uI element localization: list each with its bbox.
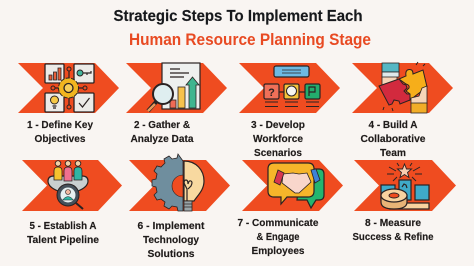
icon: handshake in speech bubbles — [268, 163, 324, 208]
arrow 6 — [129, 160, 230, 211]
icon: document with magnifier and bars — [148, 63, 200, 111]
panel: step 8 measure success and refine: Success & Refine — [352, 231, 434, 243]
panel: step 5 establish a talent pipeline: Talent Pipeline — [27, 234, 99, 246]
panel: step 2 gather and analyze data — [126, 63, 227, 145]
arrow 8 — [354, 160, 456, 211]
icon: scenario flow boxes: ? — [268, 87, 275, 99]
icon: puzzle pieces and hands — [379, 62, 427, 113]
label 5: 5 - Establish A — [30, 220, 97, 232]
icon: star podium and tape measure — [381, 163, 429, 209]
icon: talent funnel with magnifier — [48, 161, 88, 209]
icon: objectives gear and tiles — [45, 64, 94, 112]
title: Strategic Steps To Implement Each — [114, 8, 362, 25]
panel: step 1 define key objectives — [18, 63, 119, 145]
panel: step 3 develop workforce scenarios: Scenarios — [254, 147, 302, 159]
panel: step 3 develop workforce scenarios — [239, 63, 340, 159]
panel: step 2 gather and analyze data: Analyze Data — [130, 133, 194, 145]
icon: half gear half lightbulb — [152, 154, 204, 211]
panel: step 6 implement technology solutions — [129, 154, 230, 260]
label 1: 1 - Define Key — [27, 119, 93, 131]
panel: step 7 communicate and engage employees: & Engage — [256, 231, 300, 243]
panel: step 8 measure success and refine — [352, 160, 456, 243]
panel: step 4 build a collaborative team: Collaborative — [360, 133, 426, 145]
panel: step 3 develop workforce scenarios: Workforce — [253, 133, 303, 145]
label 8: 8 - Measure — [365, 217, 421, 229]
arrow 5 — [22, 160, 122, 211]
arrow 1 — [18, 63, 119, 113]
label 4: 4 - Build A — [368, 119, 418, 131]
label 6: 6 - Implement — [138, 220, 205, 232]
label 2: 2 - Gather & — [134, 119, 190, 131]
label 3: 3 - Develop — [251, 119, 305, 131]
panel: step 5 establish a talent pipeline — [22, 160, 122, 246]
label 7: 7 - Communicate — [238, 217, 319, 229]
panel: step 7 communicate and engage employees — [238, 160, 343, 257]
panel: step 4 build a collaborative team — [352, 62, 453, 159]
panel: step 6 implement technology solutions: Solutions — [148, 248, 195, 260]
arrow 3 — [239, 63, 340, 113]
arrow 4 — [352, 63, 453, 113]
arrow 2 — [126, 63, 227, 113]
panel: step 1 define key objectives: Objectives — [34, 133, 86, 145]
panel: step 4 build a collaborative team: Team — [380, 147, 406, 159]
title: Human Resource Planning Stage — [129, 31, 371, 49]
arrow 7 — [242, 160, 343, 211]
panel: step 6 implement technology solutions: Technology — [143, 234, 199, 246]
panel: step 7 communicate and engage employees: Employees — [252, 245, 305, 257]
title — [114, 8, 371, 49]
